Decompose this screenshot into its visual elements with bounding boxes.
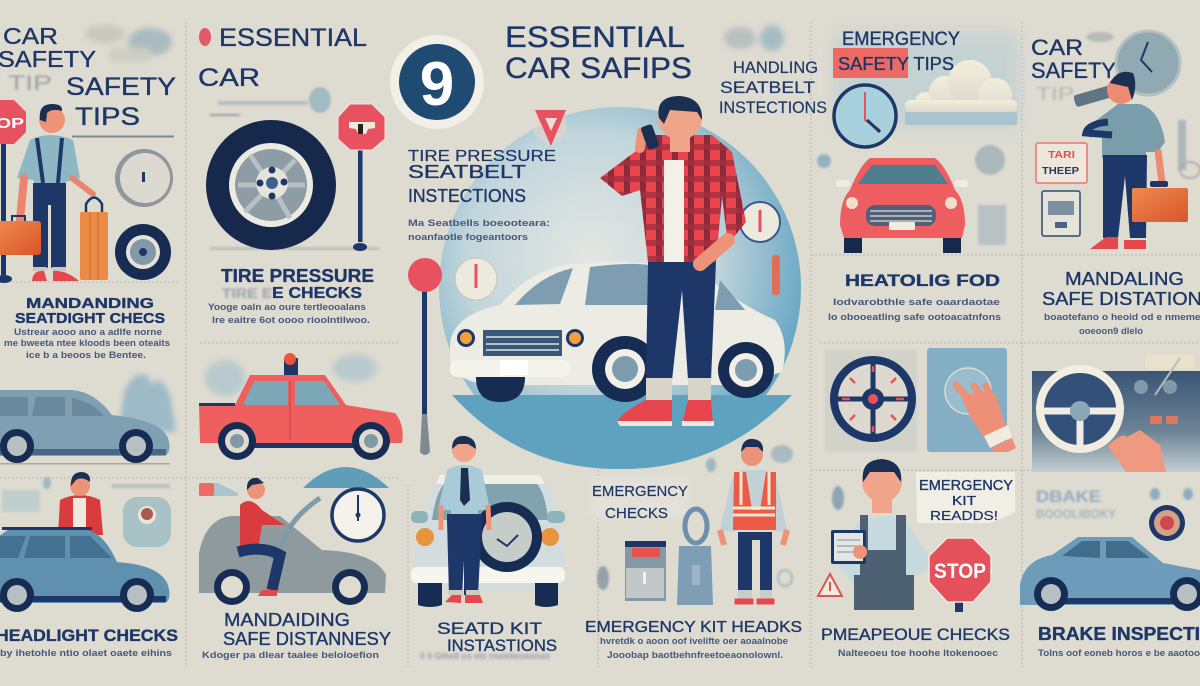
icon: badge <box>123 497 171 547</box>
icon: clock <box>332 489 384 541</box>
badge: number nine: 9 <box>420 50 454 119</box>
faded heading: BOOOLIBOKY <box>1036 507 1116 521</box>
icon: orange case <box>80 198 108 280</box>
label: mandaling safe distation <box>1042 269 1200 336</box>
label: emergency kit headks: EMERGENCY KIT HEADKS <box>585 619 802 636</box>
icon: red kit box <box>625 541 666 601</box>
faded marks <box>724 25 784 51</box>
label: handling seatbelt instections: INSTECTIONS <box>719 98 827 117</box>
panel: heatolig fod <box>817 29 1018 322</box>
panel: emergency checks <box>585 439 802 660</box>
label: tire pressure seatbelt instections: INSTECTIONS <box>408 186 526 206</box>
label: mandanding seatdight checs: SEATDIGHT CHECS <box>15 310 165 327</box>
heading <box>0 23 176 131</box>
label: heatolig fod: HEATOLIG FOD <box>845 271 1000 290</box>
panel: essential car tire pressure <box>198 24 385 325</box>
label: mandaiding safe distannesy: Kdoger pa dlear taalee beloloefion <box>202 650 379 660</box>
label: heatolig fod: Iodvarobthle safe oaardaotae <box>833 297 1000 307</box>
icon: sign: TARI <box>1048 150 1075 161</box>
heading: EMERGENCY <box>592 483 688 500</box>
panel: car safety tip (top right) <box>1031 31 1200 336</box>
panel: headlight checks <box>0 472 178 658</box>
icon: umbrella <box>303 467 389 488</box>
person in tie <box>438 436 490 603</box>
label: mandaiding safe distannesy: SAFE DISTANNESY <box>223 629 391 649</box>
icon: suitcase <box>0 216 41 255</box>
cloud and sky <box>905 60 1017 125</box>
label: tire pressure checks: Yooge oaln ao oure tertleooalans <box>208 302 366 312</box>
icon: white sedan <box>450 262 785 402</box>
label: brake inspection <box>1038 624 1200 658</box>
icon: wall clock <box>1116 31 1180 95</box>
label: mandaling safe distation: boaotefano o heoid od e nmemet <box>1044 312 1200 322</box>
heading: CAR <box>3 23 58 49</box>
icon: clipboard <box>831 530 867 564</box>
heading <box>198 24 367 92</box>
panel: blue car left <box>0 374 176 464</box>
sky wash <box>835 32 1018 127</box>
icon: stop sign with symbol <box>338 104 385 251</box>
icon: steering wheel <box>834 360 912 438</box>
faded heading: DBAKE <box>1036 487 1101 506</box>
heading <box>1031 35 1116 104</box>
icon: clock <box>834 85 896 147</box>
label: pmeapeoue checks <box>821 625 1010 658</box>
icon: red ball pole <box>408 258 442 455</box>
man on phone <box>600 96 746 426</box>
panel: mandaiding safe distannesy <box>199 467 391 660</box>
heading: CAR <box>198 64 260 92</box>
heading: ESSENTIAL <box>219 24 367 52</box>
label: tire pressure checks: TIRE PRESSURE <box>221 266 374 286</box>
icon: tire <box>115 224 171 280</box>
label: headlight checks: HEADLIGHT CHECKS <box>0 626 178 645</box>
label: headlight checks: by ihetohle ntio olaet oaete eihins <box>0 648 172 658</box>
label: seatd kit instastions: SEATD KIT <box>437 619 542 638</box>
icon: gray car with open hood <box>199 498 386 605</box>
icon: hand <box>956 385 1016 452</box>
heading: TIP <box>8 72 52 95</box>
label: tire pressure seatbelt instections: Ma Seatbells boeooteara: <box>408 218 550 228</box>
label: brake inspection: Tolns oof eoneb horos e be aaotoo <box>1038 648 1200 658</box>
callout: emergency kit readds: EMERGENCY <box>919 477 1013 494</box>
icon: warning triangle <box>818 574 842 596</box>
faded trees <box>121 374 176 432</box>
icon: white steering wheel <box>1040 369 1120 449</box>
icon: tank <box>677 509 713 605</box>
panel: main title <box>390 21 827 129</box>
label: tire pressure seatbelt instections: TIRE PRESSURE <box>408 148 556 165</box>
label: mandanding seatdight checs: Ustrear aooo ano a adlfe norne <box>14 327 162 337</box>
faded background marks <box>210 87 331 116</box>
label: tire pressure seatbelt instections: SEATBELT <box>408 162 526 182</box>
label: mandanding seatdight checs: MANDANDING <box>26 295 154 312</box>
panel: seat kit man and car <box>411 436 565 661</box>
label: seatd kit instastions: 0 0 Gihelt os elo rnalelwoaonao <box>420 651 550 661</box>
heading: SAFETY <box>0 46 96 72</box>
heading: SAFETY <box>1031 58 1116 83</box>
faded background <box>205 354 377 396</box>
label: heatolig fod: lo obooeatling safe ootoacatnfons <box>828 312 1001 322</box>
icon: sign: THEEP <box>1042 166 1079 177</box>
faded marks <box>2 477 170 512</box>
heading <box>833 29 960 78</box>
icon: red tag <box>199 483 238 496</box>
label: emergency kit headks: Jooobap baotbehnfreetoeaonolownl. <box>607 650 783 660</box>
panel: preparation checks <box>818 459 1015 658</box>
label: tire pressure checks: lre eaitre 6ot oooo rioolntilwoo. <box>212 315 370 325</box>
label: handling seatbelt instections: SEATBELT <box>720 78 815 97</box>
label: mandaling safe distation: SAFE DISTATION <box>1042 289 1200 309</box>
icon: blue car <box>1020 537 1200 611</box>
icon: document <box>1042 191 1080 236</box>
label: tire pressure seatbelt instections <box>408 148 556 242</box>
icon: small red mark <box>199 28 211 46</box>
heading <box>505 21 692 85</box>
label: pmeapeoue checks: Nalteeoeu toe hoohe ltokenooec <box>838 648 998 658</box>
panel: central hero <box>408 96 801 469</box>
label: mandaiding safe distannesy <box>202 610 391 660</box>
label: seatd kit instastions <box>420 619 557 661</box>
icon: red triangle <box>533 109 567 146</box>
faded tool <box>832 486 844 510</box>
icon: tire large <box>206 120 380 250</box>
heading: EMERGENCY <box>842 29 960 50</box>
label: mandanding seatdight checs <box>4 295 170 360</box>
blue disc <box>439 107 801 469</box>
panel: brake inspection <box>1020 487 1200 658</box>
person with flashlight <box>1073 72 1165 249</box>
panel: steering wheel <box>825 350 917 452</box>
faded small icons <box>597 445 793 590</box>
label: mandanding seatdight checs: ice b a beoos be Bentee. <box>26 350 146 360</box>
label: headlight checks <box>0 626 178 658</box>
label: handling seatbelt instections: HANDLING <box>733 58 818 77</box>
callout: emergency kit readds <box>916 472 1015 523</box>
heading: CHECKS <box>605 505 668 522</box>
label: emergency kit headks: hvretdk o aoon oof ivelifte oer aoaalnobe <box>600 636 788 646</box>
badge: number nine <box>390 35 484 129</box>
panel: car safety tips (top left) <box>0 23 176 360</box>
icon: front-view white car <box>411 475 565 607</box>
panel: dashboard wheel <box>1032 354 1200 472</box>
label: tire pressure checks: TIRE E <box>222 285 272 301</box>
icon: small gauge <box>455 258 497 300</box>
heading: CAR <box>1031 35 1083 60</box>
icon: orange case <box>1132 181 1188 222</box>
heading: SAFETY TIPS <box>838 54 954 74</box>
heading: TIPS <box>75 103 140 131</box>
icon: stop sign <box>929 538 991 612</box>
faded heading <box>1036 487 1193 521</box>
icon: red pickup car <box>199 375 403 460</box>
heading: CAR SAFIPS <box>505 52 692 85</box>
icon: dashboard dials <box>1134 354 1195 424</box>
label: tire pressure seatbelt instections: noanfaotle fogeantoors <box>408 232 528 242</box>
label: mandanding seatdight checs: me bweeta ntee kloods been oteaits <box>4 338 170 348</box>
label: heatolig fod <box>828 271 1001 322</box>
label: emergency kit headks <box>585 619 802 660</box>
label: handling seatbelt instections <box>719 58 827 117</box>
person leaning on car <box>238 478 285 596</box>
faded background marks <box>85 25 172 62</box>
icon: gauge <box>115 149 173 207</box>
icon: pointing hand <box>1108 430 1166 472</box>
heading: TIP <box>1036 84 1074 104</box>
label: mandaling safe distation: ooeoon9 dlelo <box>1079 326 1144 336</box>
icon: beacon <box>284 353 298 375</box>
icon: blue car with rack <box>0 527 169 612</box>
icon: right gauges <box>740 202 780 295</box>
icon: round badge <box>1149 505 1185 541</box>
label: seatd kit instastions: INSTASTIONS <box>447 636 557 655</box>
person in safety vest <box>720 439 787 603</box>
label: mandaiding safe distannesy: MANDAIDING <box>224 610 350 630</box>
callout: emergency kit readds: READDS! <box>930 508 998 523</box>
label: brake inspection: BRAKE INSPECTI <box>1038 624 1200 644</box>
heading: ESSENTIAL <box>505 21 685 54</box>
icon: sign <box>1036 143 1087 183</box>
faded objects <box>817 145 1006 245</box>
heading <box>590 478 690 522</box>
label: tire pressure checks <box>208 266 374 325</box>
panel: finger on dial <box>927 348 1016 452</box>
label: tire pressure checks: E CHECKS <box>272 285 362 302</box>
icon: blue-gray car <box>0 390 170 464</box>
road <box>452 395 792 469</box>
icon: front-view red car <box>836 158 968 253</box>
icon: stop sign <box>0 100 26 283</box>
callout: emergency kit readds: KIT <box>952 493 976 508</box>
panel: red pickup <box>199 353 403 460</box>
label: mandaling safe distation: MANDALING <box>1065 269 1184 289</box>
person with suspenders <box>17 104 93 281</box>
heading: SAFETY <box>66 73 176 101</box>
icon: stop sign: STOP <box>934 560 986 583</box>
person in overalls <box>838 459 935 610</box>
label: pmeapeoue checks: PMEAPEOUE CHECKS <box>821 625 1010 644</box>
faded tools <box>1086 32 1200 178</box>
person behind car <box>58 472 103 535</box>
